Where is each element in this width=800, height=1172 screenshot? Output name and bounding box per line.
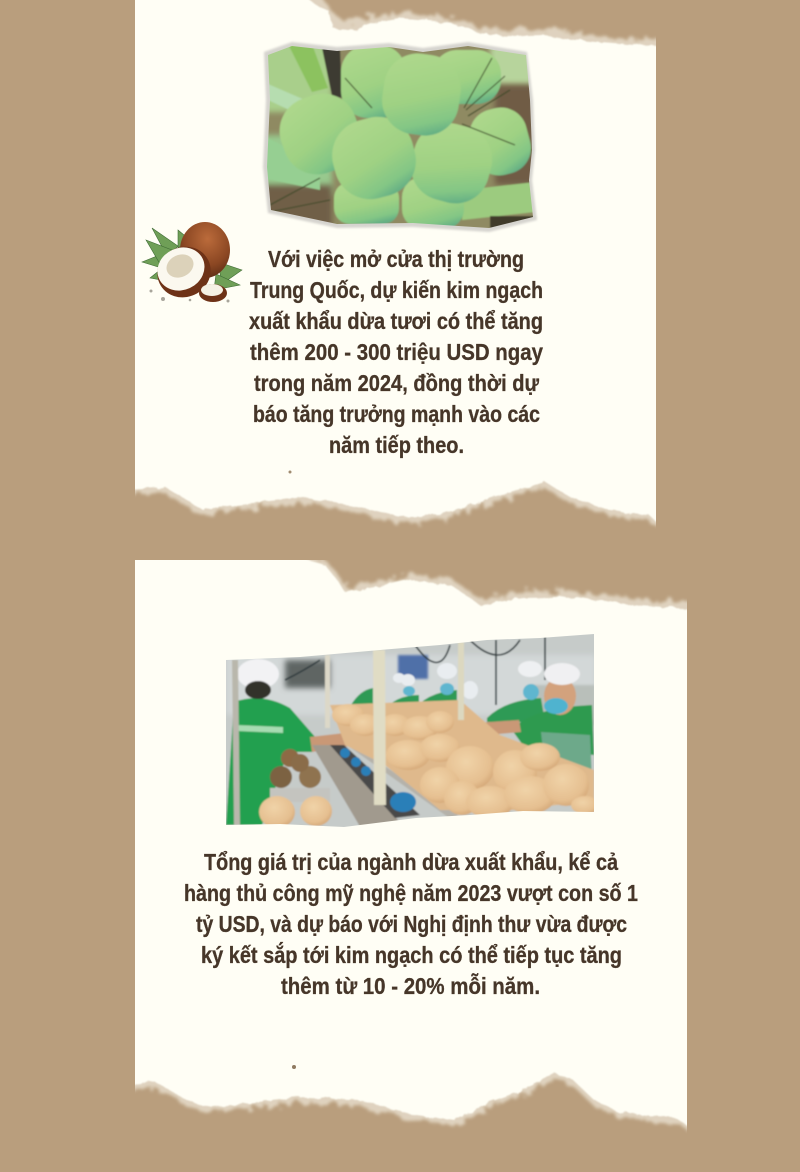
text block: lower paragraph: [184, 849, 638, 999]
worker foreground left: [226, 659, 348, 825]
text block: lower paragraph: Tổng giá trị của ngành dừa xuất khẩu, kể cả: [204, 849, 618, 875]
photo: green coconuts: [260, 40, 540, 235]
text block: upper paragraph: Trung Quốc, dự kiến kim ngạch: [250, 277, 543, 303]
text block: upper paragraph: trong năm 2024, đồng thời dự: [254, 370, 539, 396]
conveyor and husked coconuts: [232, 642, 599, 830]
photo: coconut processing line: [220, 630, 600, 830]
icon: coconut illustration: [142, 222, 242, 306]
text block: upper paragraph: Với việc mở cửa thị trường: [268, 246, 524, 272]
panel: lower torn paper: [120, 550, 700, 1135]
text block: upper paragraph: thêm 200 - 300 triệu USD ngay: [250, 339, 543, 365]
text block: upper paragraph: xuất khẩu dừa tươi có thể tăng: [249, 308, 543, 334]
text block: lower paragraph: ký kết sắp tới kim ngạch có thể tiếp tục tăng: [201, 941, 622, 968]
text block: lower paragraph: hàng thủ công mỹ nghệ năm 2023 vượt con số 1: [184, 880, 638, 906]
text block: lower paragraph: tỷ USD, và dự báo với Nghị định thư vừa được: [196, 911, 627, 937]
panel: upper torn paper: [120, 0, 670, 535]
text block: upper paragraph: [249, 246, 543, 458]
text block: upper paragraph: báo tăng trưởng mạnh vào các: [253, 401, 540, 427]
worker foreground right: [485, 662, 594, 770]
background workers: [351, 661, 545, 722]
text block: upper paragraph: năm tiếp theo.: [329, 432, 464, 458]
text block: lower paragraph: thêm từ 10 - 20% mỗi năm.: [281, 972, 540, 999]
